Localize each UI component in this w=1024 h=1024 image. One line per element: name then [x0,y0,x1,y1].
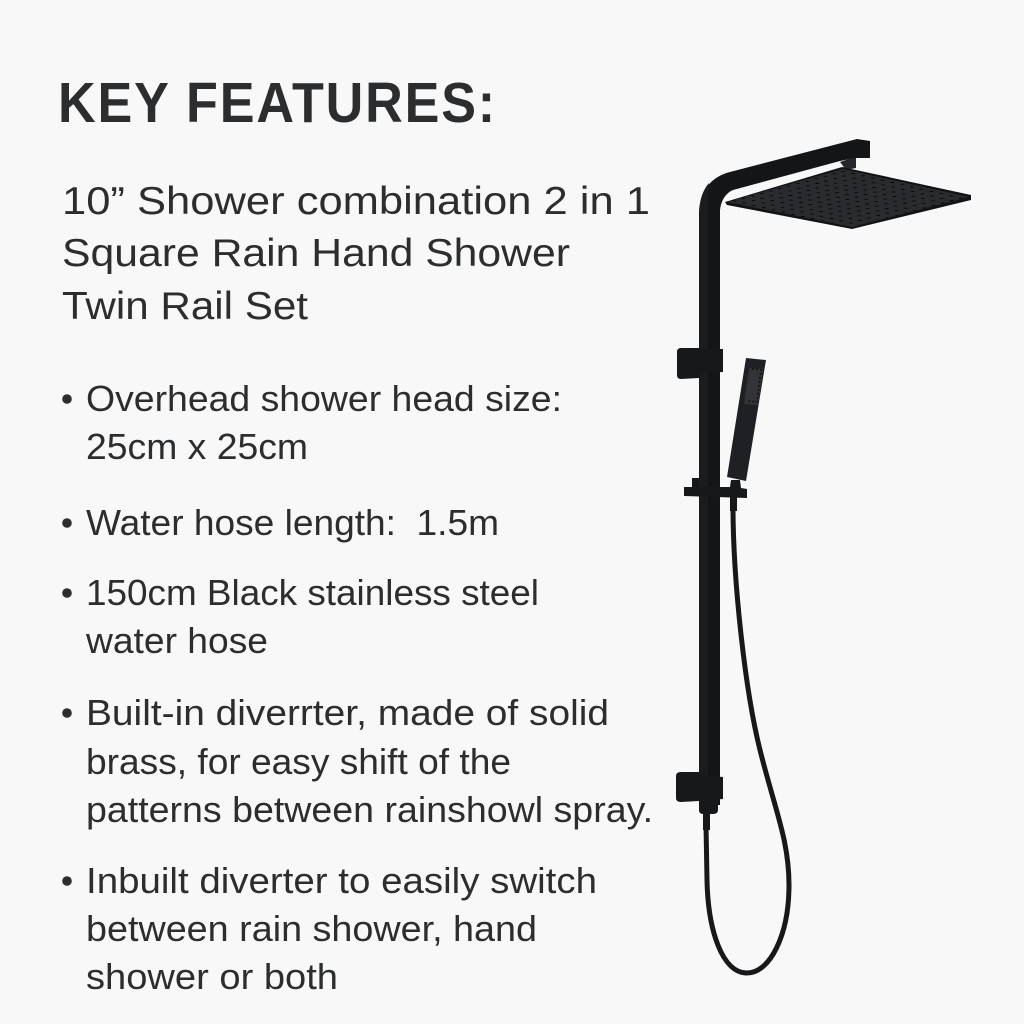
shower head connector [840,158,856,170]
hose connector at holder [730,497,737,511]
subtitle [62,180,650,328]
hand shower [727,358,766,481]
product illustration: shower set [676,139,971,973]
bullet: built-in diverter: brass, for easy shift of the [86,741,511,782]
subtitle: Twin Rail Set [62,285,308,328]
bullet: overhead shower head size: 25cm x 25cm [86,426,308,467]
bullet: inbuilt diverter: Inbuilt diverter to easily switch [86,860,597,901]
title: KEY FEATURES: [58,71,497,135]
bullet: stainless steel hose: water hose [85,620,268,661]
subtitle: Square Rain Hand Shower [62,232,570,275]
feature list [62,378,653,997]
rail end outlet [699,800,718,814]
rain shower head [725,167,971,229]
bullet: overhead shower head size [62,378,562,467]
lower wall bracket [676,772,723,802]
upper wall bracket [677,348,723,379]
bullet: water hose length: Water hose length: 1.5m [86,502,499,543]
bullet: built-in diverter: Built-in diverrter, made of solid [86,692,609,733]
bullet: built-in diverter: patterns between rainshowl spray. [86,789,653,830]
bullet: built-in diverter [62,692,653,830]
slider holder [684,478,747,498]
bullet: stainless steel hose: 150cm Black stainless steel [86,572,539,613]
subtitle: 10” Shower combination 2 in 1 [62,180,650,223]
rail highlight [699,183,709,805]
bullet: stainless steel hose [62,572,539,661]
bullet: inbuilt diverter [62,860,597,997]
rail and arm [699,139,870,805]
bullet: overhead shower head size: Overhead shower head size: [86,378,562,419]
bullet: inbuilt diverter: between rain shower, hand [86,908,537,949]
bullet: inbuilt diverter: shower or both [86,956,338,997]
hose [706,506,789,973]
